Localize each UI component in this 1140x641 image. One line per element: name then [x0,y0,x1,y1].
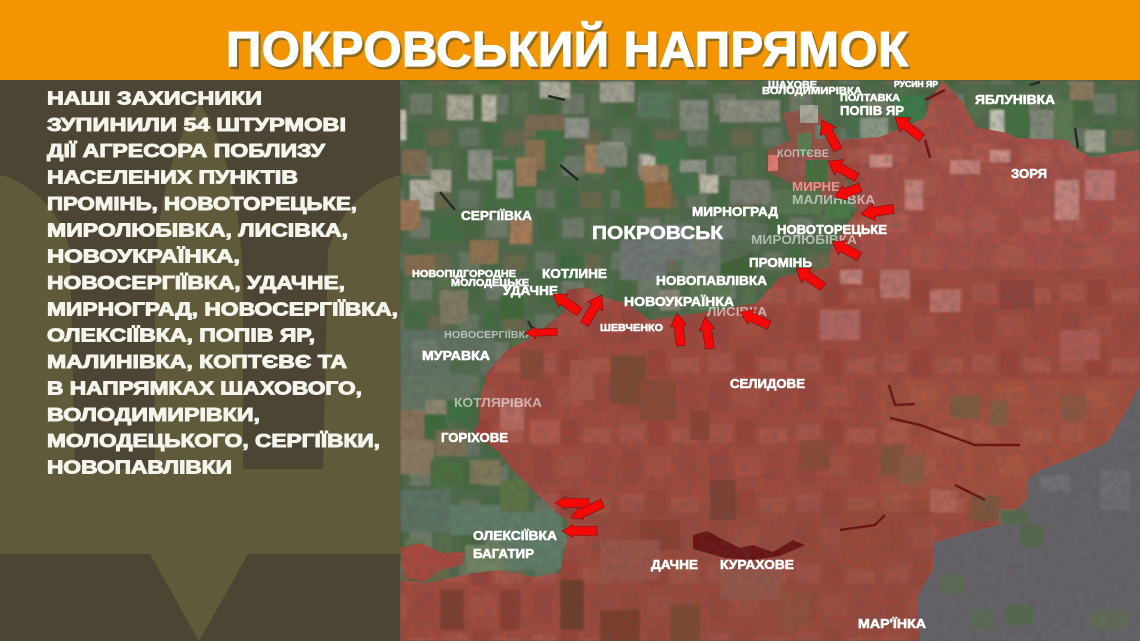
body text: repelled assaults: НОВОУКРАЇНКА, [47,247,240,267]
dark creeks on green [440,82,1078,328]
red attack arrows [525,110,927,538]
label: Удачне: УДАЧНЕ [503,284,558,298]
trident emblem background [0,102,400,641]
label: Новопавлівка: НОВОПАВЛІВКА [656,274,767,288]
arrow: Oleksiivka north [555,496,589,510]
arrow: Promin [791,261,828,294]
label: Котлярівка: КОТЛЯРІВКА [454,396,542,410]
label: Новоукраїнка: НОВОУКРАЇНКА [624,294,734,309]
label: Покровськ: ПОКРОВСЬК [592,223,724,243]
label: Володимирівка: ВОЛОДИМИРІВКА [762,85,862,97]
label: Селидове: СЕЛИДОВЕ [730,377,805,391]
label: Малинівка: МАЛИНІВКА [792,192,876,207]
arrow: Novotoretske [828,235,863,264]
green fields inside contested patch [768,105,850,218]
arrow: Oleksiivka middle [568,497,605,524]
body text: repelled assaults: ОЛЕКСІЇВКА, ПОПІВ ЯР, [47,326,315,346]
arrow: Koptieve [824,153,861,185]
label: Дачне: ДАЧНЕ [651,558,698,572]
body text: repelled assaults: ПРОМІНЬ, НОВОТОРЕЦЬКЕ, [47,194,357,214]
body text: repelled assaults: МИРОЛЮБІВКА, ЛИСІВКА, [47,220,348,240]
label: Яблунівка: ЯБЛУНІВКА [975,92,1056,107]
label: Мирноград: МИРНОГРАД [692,205,778,219]
body text: repelled assaults: В НАПРЯМКАХ ШАХОВОГО, [47,378,362,398]
label: Новосергіївка: НОВОСЕРГІЇВКА [444,328,533,341]
body text: repelled assaults: НОВОПАВЛІВКИ [47,458,232,478]
label: Русин Яр: РУСИН ЯР [894,80,939,89]
body text: repelled assaults: ЗУПИНИЛИ 54 ШТУРМОВІ [47,115,346,135]
title bar [0,0,1140,80]
label: Горіхове: ГОРІХОВЕ [441,431,508,445]
label: Новоторецьке: НОВОТОРЕЦЬКЕ [777,222,887,237]
title: ПОКРОВСЬКИЙ НАПРЯМОК [226,22,908,77]
label: Мар'їнка: МАР'ЇНКА [858,616,926,631]
label: Олексіївка: ОЛЕКСІЇВКА [473,528,557,543]
map labels [412,80,1056,631]
arrow: Popiv Yar east [889,110,927,145]
left text panel [0,78,400,641]
label: Лисівка: ЛИСІВКА [707,305,767,319]
reservoir Kurakhove [693,531,805,560]
satellite map [400,80,1140,641]
label: Новопідгородне: НОВОПІДГОРОДНЕ [412,269,516,280]
contested red patch near Malynivka [768,108,856,200]
arrow: Malynivka [860,200,895,223]
body text: repelled assaults [47,88,398,478]
body text: repelled assaults: МАЛИНІВКА, КОПТЄВЄ ТА [47,352,347,372]
body text: repelled assaults: ВОЛОДИМИРІВКИ, [47,405,260,425]
body text: repelled assaults: НАСЕЛЕНИХ ПУНКТІВ [47,168,298,188]
label: Шевченко: ШЕВЧЕНКО [600,322,663,334]
arrow: Kotlyne [577,290,610,329]
label: Котлине: КОТЛИНЕ [542,267,607,281]
red patch near Bahatyr [400,543,465,582]
label: Коптєве: КОПТЄВЕ [777,148,829,160]
photographic grain [400,80,1140,641]
arrow: Lysivka [737,305,772,332]
ravines [840,90,1020,530]
occupied territory (red overlay) [400,80,1140,641]
arrow: Oleksiivka south [562,524,597,538]
body text: repelled assaults: НОВОСЕРГІЇВКА, УДАЧНЕ, [47,273,345,293]
label: Молодецьке: МОЛОДЕЦЬКЕ [451,278,529,289]
label: Курахове: КУРАХОВЕ [720,558,794,572]
urban grey zone Donetsk [917,385,1140,641]
arrow: Popiv Yar west [814,116,846,154]
body text: repelled assaults: НАШІ ЗАХИСНИКИ [47,88,262,108]
arrow: Novoukrainka west [669,312,689,347]
label: Миролюбівка: МИРОЛЮБІВКА [751,232,858,247]
arrow: Novoserhiivka [525,326,557,339]
arrow: Udachne [549,287,584,319]
label: Зоря: ЗОРЯ [1011,166,1047,181]
grey zone green patches [940,470,1130,630]
body text: repelled assaults: МИРНОГРАД, НОВОСЕРГІЇВКА, [47,299,398,319]
body text: repelled assaults: ДІЇ АГРЕСОРА ПОБЛИЗУ [47,141,326,161]
arrow: Novoukrainka east [697,316,718,350]
city of Pokrovsk built-up area [642,215,770,274]
title shadow: ПОКРОВСЬКИЙ НАПРЯМОК [228,24,910,80]
label: Промінь: ПРОМІНЬ [749,255,812,270]
label: Полтавка: ПОЛТАВКА [840,92,900,104]
label: Мирне: МИРНЕ [792,179,840,194]
green unoccupied terrain [400,80,1140,641]
label: Попів Яр: ПОПІВ ЯР [840,103,904,118]
label: Шахове: ШАХОВЕ [768,80,817,91]
label: Муравка: МУРАВКА [422,349,490,363]
label: Сергіївка: СЕРГІЇВКА [461,208,532,223]
body text: repelled assaults: МОЛОДЕЦЬКОГО, СЕРГІЇВКИ, [47,431,380,451]
arrow: Myrne [831,180,863,205]
label: Багатир: БАГАТИР [473,547,534,561]
